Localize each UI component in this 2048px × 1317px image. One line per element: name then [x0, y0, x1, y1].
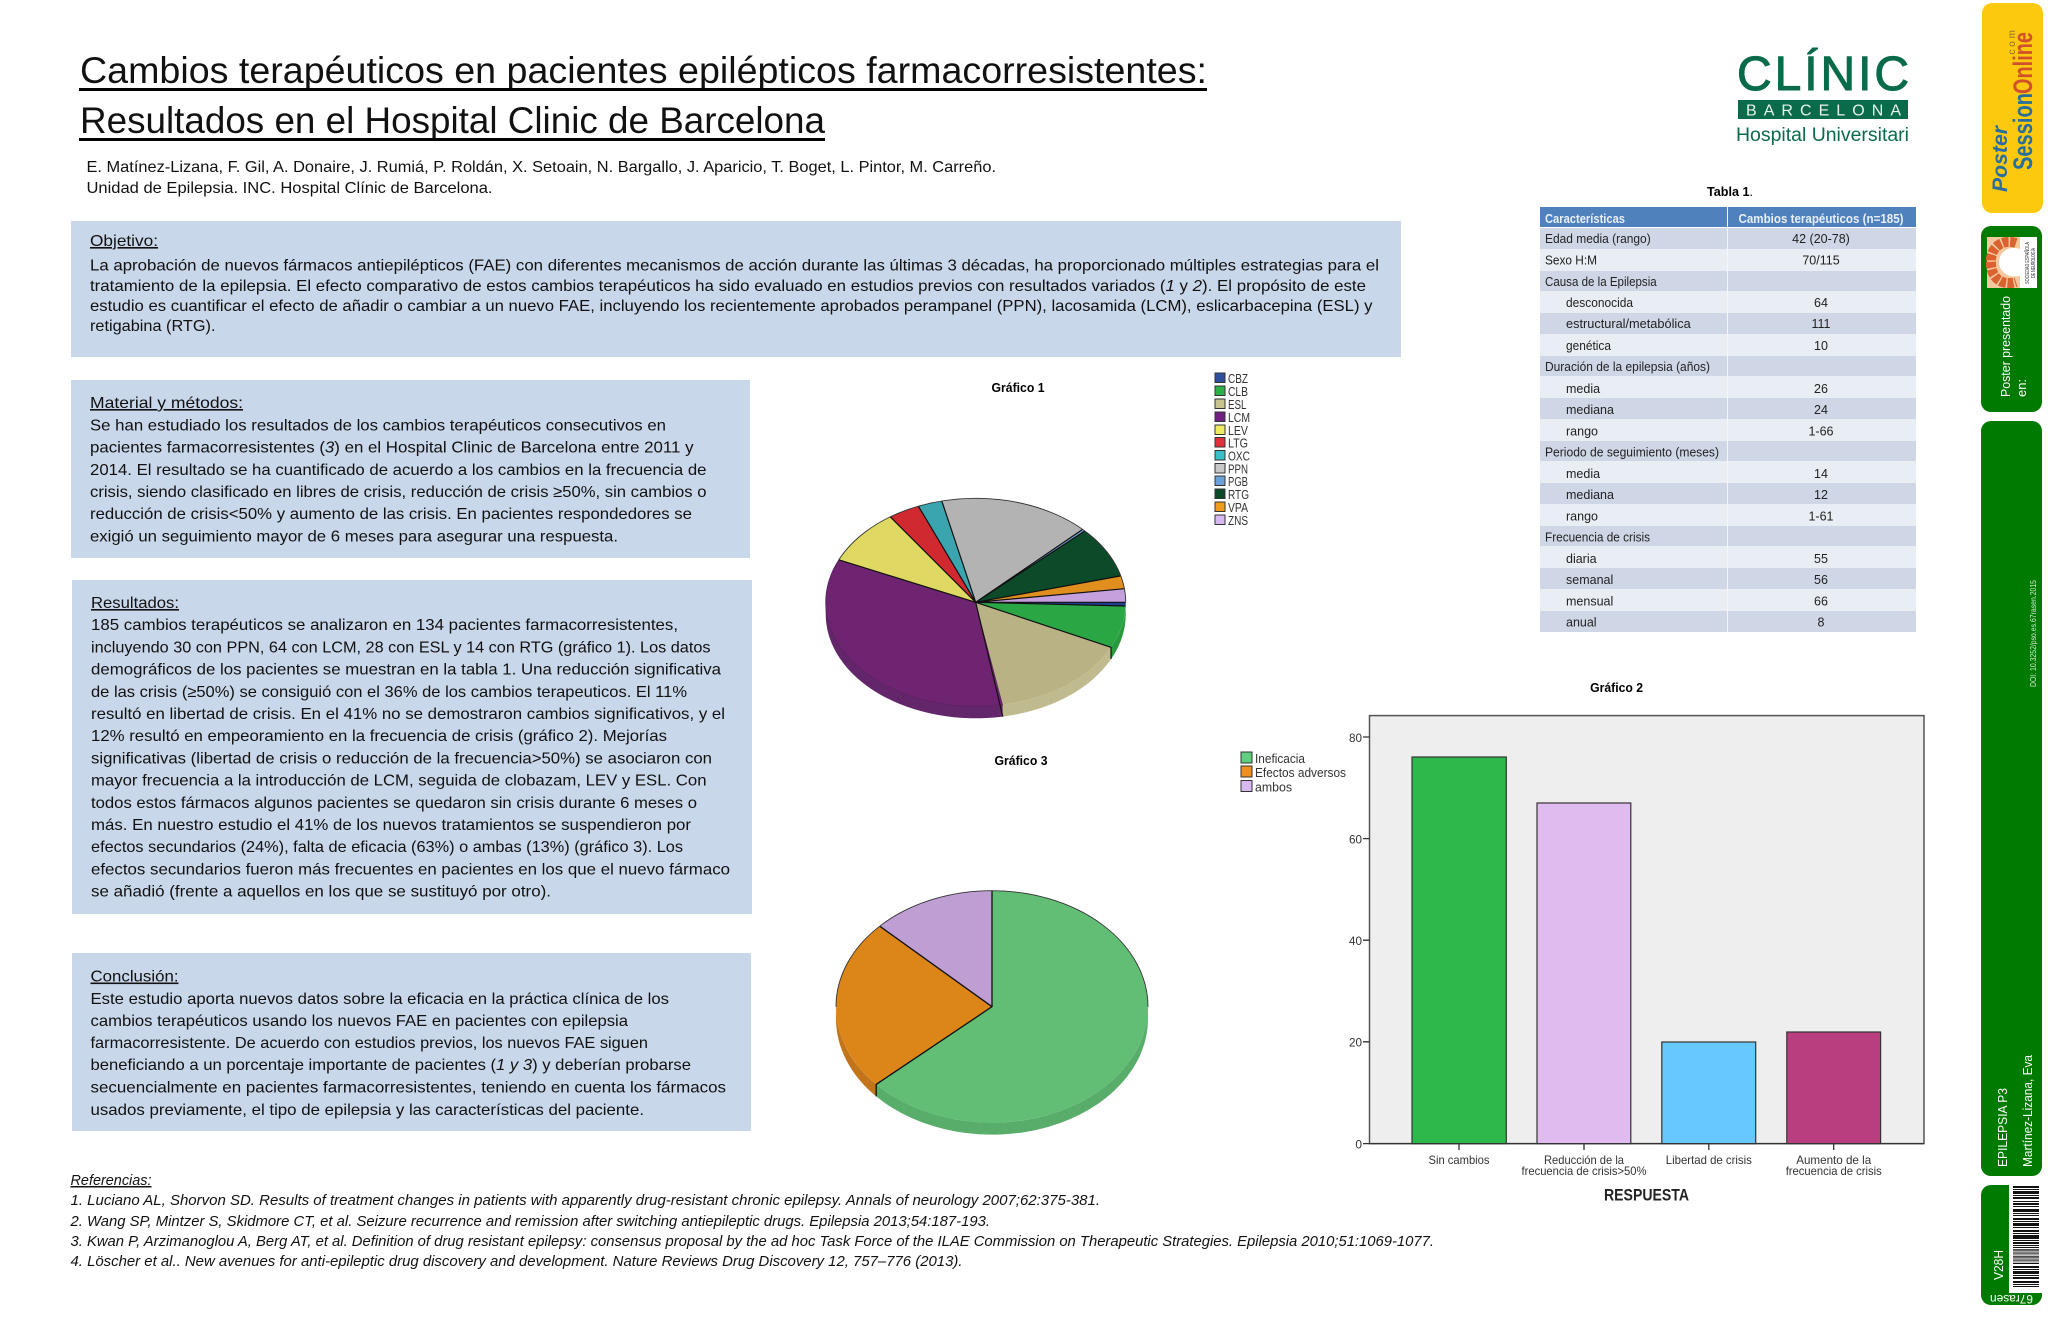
table 1: mediana [1566, 488, 1614, 502]
chart: Gráfico 2 bars: 20 [1349, 1036, 1362, 1050]
panel: objetivo: La aprobación de nuevos fármacos antiepilépticos (FAE) con diferentes mecanismos de acción durante las últimas 3 décadas, ha proporcionado múltiples estrategias para el [90, 258, 1379, 274]
table 1: mediana [1566, 403, 1614, 417]
table 1: 10 [1814, 339, 1828, 353]
table 1: Cambios terapéuticos (n=185) [1738, 212, 1904, 226]
references: 3. Kwan P, Arzimanoglou A, Berg AT, et al. Definition of drug resistant epilepsy: consensus proposal by the ad hoc Task Force of the ILAE Commission on Therapeutic Strategies. Epilepsia 2010;51:1069-1077. [70, 1233, 1434, 1250]
table 1: Características [1545, 212, 1625, 226]
panel: resultados: 185 cambios terapéuticos se analizaron en 134 pacientes farmacorresistentes, [91, 617, 678, 634]
legend: Gráfico 1: PPN [1228, 462, 1248, 476]
panel: resultados: Resultados: [91, 595, 179, 612]
chart: Gráfico 3 pie: Gráfico 3 [994, 753, 1048, 768]
table 1: 8 [1818, 616, 1825, 630]
chart: Gráfico 2 bars: Aumento de la [1796, 1153, 1872, 1167]
icon: brain society logo [1987, 237, 2037, 288]
legend: Gráfico 1: LEV [1228, 424, 1249, 438]
table 1: genética [1566, 339, 1611, 353]
logo: Clínic Barcelona: BARCELONA [1746, 102, 1901, 120]
chart: Gráfico 2 bars: 60 [1349, 832, 1362, 846]
legend: Gráfico 1: CLB [1228, 385, 1248, 399]
title [79, 50, 1207, 141]
panel: poster presentado en [1981, 226, 2042, 412]
panel: resultados: de las crisis (≥50%) se consiguió con el 36% de los cambios terapeuticos. El 11% [91, 684, 687, 701]
table 1: 42 (20-78) [1792, 232, 1850, 246]
references: 1. Luciano AL, Shorvon SD. Results of treatment changes in patients with apparently drug-resistant chronic epilepsy. Annals of neurology 2007;62:375-381. [70, 1192, 1100, 1209]
panel: material y métodos: pacientes farmacorresistentes ( 3) en el Hospital Clinic de Barcelona entre 2011 y [90, 440, 694, 457]
chart: Gráfico 2 bars: RESPUESTA [1604, 1186, 1689, 1204]
panel: session and author sidebar [1981, 421, 2042, 1176]
panel: conclusión: Conclusión: [90, 968, 178, 986]
table 1: 1-66 [1808, 424, 1834, 438]
panel: objetivo [71, 221, 1401, 357]
legend: Gráfico 1: ZNS [1228, 514, 1248, 528]
table 1: Causa de la Epilepsia [1545, 275, 1657, 289]
table 1 [1540, 184, 1916, 632]
legend: Gráfico 3 [1241, 752, 1346, 794]
panel: material y métodos: exigió un seguimiento mayor de 6 meses para asegurar una respuesta. [90, 528, 618, 546]
legend: Gráfico 1 [1215, 372, 1250, 528]
table 1: Sexo H:M [1545, 254, 1597, 268]
panel: material y métodos: Material y métodos: [90, 395, 243, 412]
panel: conclusión: beneficiando a un porcentaje importante de pacientes ( 1 y 3) y deberían probarse [90, 1057, 691, 1074]
table 1: Frecuencia de crisis [1545, 530, 1650, 544]
title: Cambios terapéuticos en pacientes epilépticos farmacorresistentes: [80, 50, 1207, 91]
panel: conclusión: farmacorresistente. De acuerdo con estudios previos, los nuevos FAE siguen [90, 1035, 648, 1052]
chart: Gráfico 2 bars: frecuencia de crisis>50% [1522, 1164, 1647, 1178]
panel: conclusión: Este estudio aporta nuevos datos sobre la eficacia en la práctica clínica de los [90, 991, 669, 1008]
references: 4. Löscher et al.. New avenues for anti-epileptic drug discovery and development. Nature Reviews Drug Discovery 12, 757–776 (2013). [70, 1253, 962, 1270]
panel: material y métodos: Se han estudiado los resultados de los cambios terapéuticos consecutivos en [90, 418, 666, 434]
banner: Poster Session Online: Session [2008, 93, 2038, 170]
panel: conclusión [72, 953, 751, 1131]
chart: Gráfico 2 bars: frecuencia de crisis [1786, 1164, 1882, 1178]
legend: Gráfico 1: PGB [1228, 475, 1248, 489]
panel: conclusión: cambios terapéuticos usando los nuevos FAE en pacientes con epilepsia [90, 1013, 628, 1030]
icon: brain society logo: SOCIEDAD ESPAÑOLA [2024, 241, 2031, 284]
panel: resultados: incluyendo 30 con PPN, 64 con LCM, 28 con ESL y 14 con RTG (gráfico 1). Los datos [91, 640, 710, 656]
panel: resultados: demográficos de los pacientes se muestran en la tabla 1. Una reducción significativa [91, 662, 721, 679]
table 1: rango [1566, 510, 1598, 524]
panel: barcode and id [1981, 1185, 2043, 1306]
panel: resultados: todos estos fármacos algunos pacientes se quedaron sin crisis durante 6 meses o [91, 795, 697, 812]
panel: resultados: mayor frecuencia a la introducción de LCM, seguida de clobazam, LEV y ESL. Con [91, 773, 706, 790]
table 1: mensual [1566, 594, 1613, 608]
panel: objetivo: retigabina (RTG). [90, 318, 216, 335]
authors and affiliation [86, 159, 996, 197]
table 1: desconocida [1566, 296, 1633, 310]
table 1: 111 [1811, 317, 1831, 331]
table 1: diaria [1566, 552, 1597, 566]
panel: resultados: más. En nuestro estudio el 41% de los nuevos tratamientos se suspendieron por [91, 817, 692, 834]
banner: Poster Session Online: .com [2007, 30, 2018, 60]
panel: material y métodos: crisis, siendo clasificado en libres de crisis, reducción de crisis ≥50%, sin cambios o [90, 484, 707, 501]
table 1: 64 [1814, 296, 1828, 310]
panel: session and author sidebar: Martínez-Lizana, Eva [2020, 1054, 2035, 1167]
panel: barcode and id: V28H [1991, 1250, 2006, 1280]
table 1: media [1566, 382, 1600, 396]
panel: resultados [72, 580, 752, 914]
chart: Gráfico 2 bars [1349, 680, 1924, 1204]
table 1: 66 [1814, 594, 1828, 608]
chart: Gráfico 2 bars: Gráfico 2 [1590, 680, 1643, 695]
references: 2. Wang SP, Mintzer S, Skidmore CT, et al. Seizure recurrence and remission after switching antiepileptic drugs. Epilepsia 2013;54:187-193. [70, 1213, 990, 1230]
authors and affiliation: E. Matínez-Lizana, F. Gil, A. Donaire, J. Rumiá, P. Roldán, X. Setoain, N. Bargallo, J. Aparicio, T. Boget, L. Pintor, M. Carreño. [86, 159, 996, 176]
chart: Gráfico 1 pie [826, 380, 1126, 718]
panel: conclusión: usados previamente, el tipo de epilepsia y las características del paciente. [90, 1102, 644, 1119]
logo: Clínic Barcelona [1736, 48, 1909, 146]
panel: resultados: efectos secundarios fueron más frecuentes en pacientes en los que el nuevo fármaco [91, 862, 730, 878]
panel: session and author sidebar: DOI: 10.3252/pso.es.67rasen.2015 [2029, 580, 2038, 687]
legend: Gráfico 1: LCM [1228, 411, 1250, 425]
chart: Gráfico 1 pie: Gráfico 1 [992, 380, 1044, 395]
chart: Gráfico 2 bars: 80 [1349, 731, 1362, 745]
table 1: 56 [1814, 573, 1828, 587]
chart: Gráfico 2 bars: Libertad de crisis [1666, 1153, 1752, 1167]
legend: Gráfico 1: ESL [1228, 398, 1247, 412]
banner: Poster Session Online [1982, 3, 2043, 213]
banner: Poster Session Online: Online [2008, 32, 2038, 94]
chart: Gráfico 3 pie [836, 753, 1148, 1135]
banner: Poster Session Online: Poster [1989, 124, 2012, 192]
table 1: 26 [1814, 382, 1828, 396]
legend: Gráfico 3: Ineficacia [1255, 752, 1305, 766]
table 1: Edad media (rango) [1545, 232, 1651, 246]
table 1: Tabla 1. [1707, 184, 1753, 199]
panel: objetivo: estudio es cuantificar el efecto de añadir o cambiar a un nuevo FAE, incluyendo los recientemente aprobados perampanel (PPN), lacosamida (LCM), eslicarbacepina (ESL) y [90, 298, 1373, 315]
table 1: Periodo de seguimiento (meses) [1545, 446, 1719, 460]
table 1: 14 [1814, 467, 1828, 481]
chart: Gráfico 2 bars: 40 [1349, 934, 1362, 948]
table 1: 70/115 [1802, 254, 1840, 268]
table 1: anual [1566, 616, 1597, 630]
table 1: 1-61 [1808, 510, 1834, 524]
panel: objetivo: tratamiento de la epilepsia. El efecto comparativo de estos cambios terapéuticos ha sido evaluado en estudios previos con resultados variados ( 1 y 2). El propósito de este [90, 278, 1366, 295]
panel: resultados: se añadió (frente a aquellos en los que se sustituyó por otro). [91, 884, 551, 901]
icon: brain society logo: DE NEUROLOGÍA [2030, 248, 2037, 278]
panel: objetivo: Objetivo: [90, 233, 158, 250]
chart: Gráfico 2 bars: Sin cambios [1428, 1153, 1490, 1167]
panel: resultados: efectos secundarios (24%), falta de eficacia (63%) o ambas (13%) (gráfico 3). Los [91, 839, 683, 856]
panel: material y métodos: 2014. El resultado se ha cuantificado de acuerdo a los cambios en la frecuencia de [90, 462, 707, 479]
legend: Gráfico 1: OXC [1228, 450, 1250, 464]
authors and affiliation: Unidad de Epilepsia. INC. Hospital Clínic de Barcelona. [86, 180, 492, 197]
table 1: 12 [1814, 488, 1828, 502]
legend: Gráfico 3: Efectos adversos [1255, 766, 1346, 780]
legend: Gráfico 1: CBZ [1228, 372, 1248, 386]
table 1: media [1566, 467, 1600, 481]
table 1: 24 [1814, 403, 1828, 417]
panel: barcode and id: 67rasen [1990, 1292, 2033, 1306]
chart: Gráfico 2 bars: Reducción de la [1544, 1153, 1624, 1167]
panel: material y métodos [71, 380, 750, 558]
panel: material y métodos: reducción de crisis<50% y aumento de las crisis. En pacientes respondedores se [90, 506, 692, 523]
panel: resultados: resultó en libertad de crisis. En el 41% no se demostraron cambios significativos, y el [91, 706, 725, 723]
table 1: 55 [1814, 552, 1828, 566]
panel: session and author sidebar: EPILEPSIA P3 [1995, 1088, 2010, 1167]
title: Resultados en el Hospital Clinic de Barcelona [80, 100, 825, 141]
panel: conclusión: secuencialmente en pacientes farmacorresistentes, teniendo en cuenta los fármacos [90, 1080, 726, 1097]
panel: resultados: 12% resultó en empeoramiento en la frecuencia de crisis (gráfico 2). Mejorías [91, 728, 667, 745]
panel: resultados: significativas (libertad de crisis o reducción de la frecuencia>50%) se asociaron con [91, 750, 712, 768]
table 1: estructural/metabólica [1566, 317, 1691, 331]
legend: Gráfico 1: RTG [1228, 488, 1249, 502]
panel: poster presentado en: Poster presentado [1998, 296, 2013, 397]
references: Referencias: [70, 1172, 152, 1189]
logo: Clínic Barcelona: CLÍNIC [1737, 48, 1909, 101]
logo: Clínic Barcelona: Hospital Universitari [1736, 125, 1909, 146]
legend: Gráfico 1: LTG [1228, 436, 1248, 450]
legend: Gráfico 3: ambos [1255, 780, 1292, 794]
panel: poster presentado en: en: [2014, 379, 2029, 397]
icon: barcode stripes [2013, 1186, 2039, 1287]
table 1: semanal [1566, 573, 1613, 587]
references [70, 1172, 1434, 1270]
chart: Gráfico 2 bars: 0 [1355, 1138, 1362, 1152]
table 1: Duración de la epilepsia (años) [1545, 360, 1710, 374]
table 1: rango [1566, 424, 1598, 438]
legend: Gráfico 1: VPA [1228, 501, 1249, 515]
